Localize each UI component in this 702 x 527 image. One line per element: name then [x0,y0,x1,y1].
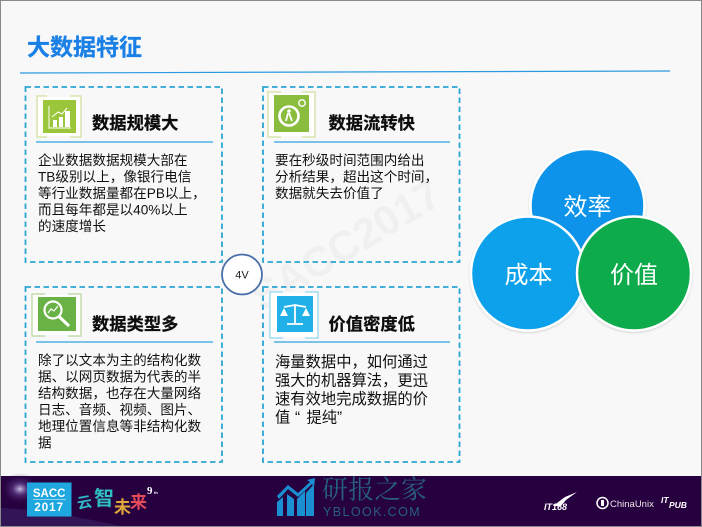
logo: ITPUB: PUB [669,500,687,510]
body text: 分析结果，超出这个时间， [275,168,438,184]
logo text: 研报之家: 研报之家 [322,470,427,506]
title: 大数据特征 [27,34,142,60]
logo: IT168: IT168 [544,502,567,512]
badge: 4V: 4V [235,270,249,282]
icon: scales [269,291,322,341]
logo: 云智未来: 9 [147,485,153,497]
heading: 数据规模大 [92,113,178,133]
body text: 企业数据数据规模大部在 [38,152,188,168]
logo: SACC 2017: SACC [33,488,65,500]
panel: data scale [26,87,222,262]
heading: 数据类型多 [92,314,178,334]
logo: ChinaUnix [597,498,654,510]
footer band [0,470,701,526]
panel: data velocity [263,87,460,262]
body text: 要在秒级时间范围内给出 [275,153,425,168]
icon: bar chart [36,95,85,141]
body text: 除了以文本为主的结构化数 [38,353,202,368]
panel: data variety [26,287,222,462]
logo: SACC 2017: 2017 [34,502,64,514]
logo text: YBLOOK.COM: YBLOOK.COM [323,505,421,519]
body text: 据、以网页数据为代表的半 [38,370,201,384]
body text: 地理位置信息等非结构化数 [38,418,202,434]
body text: 海量数据中，如何通过 [275,354,428,371]
title rule [20,71,670,73]
logo: 云智未来: th [154,490,158,495]
logo: ChinaUnix: ChinaUnix [610,499,654,510]
logo: 云智未来: 智 [94,487,114,510]
body text: “ [295,410,300,426]
body text: 等行业数据量都在PB以上， [38,185,206,201]
body text: ” [337,410,342,426]
logo: ITPUB [661,495,687,510]
logo: 云智未来: 云 [76,494,93,513]
body text: 的速度增长 [38,219,106,234]
badge: 4V [222,254,262,294]
body text: 数据就失去价值了 [275,186,384,201]
body text: 提纯 [306,410,337,426]
heading: 数据流转快 [328,113,415,133]
icon: gear with runner [267,91,319,141]
circle: cost [471,216,585,330]
body text: 速有效地完成数据的价 [275,391,428,408]
circle: efficiency [530,149,644,263]
body text: 日志、音频、视频、图片、 [38,402,201,418]
logo: 云智未来 [76,485,158,517]
icon: magnifier [31,292,85,340]
venn diagram [471,149,691,330]
heading: 价值密度低 [328,314,415,334]
logo: IT168 [544,492,577,512]
watermark: SACC2017 [242,170,449,320]
circle: cost: 成本 [504,262,552,289]
panel: low value density [263,287,460,462]
body text: 强大的机器算法，更迅 [275,372,428,390]
body text: 而且每年都是以40%以上 [38,202,188,218]
body text: 据 [38,436,52,450]
body text: TB级别以上，像银行电信 [38,170,191,184]
logo: YBLOOK chart [277,478,315,516]
logo: 云智未来: 未 [114,498,131,517]
circle: value [577,216,691,330]
body text: 值 [275,410,290,426]
body text: 结构数据，也存在大量网络 [38,386,202,401]
logo: 云智未来: 来 [130,493,147,512]
circle: value: 价值 [610,262,658,289]
logo: ITPUB: IT [661,495,669,505]
circle: efficiency: 效率 [564,194,612,221]
logo: SACC 2017 [27,482,72,516]
